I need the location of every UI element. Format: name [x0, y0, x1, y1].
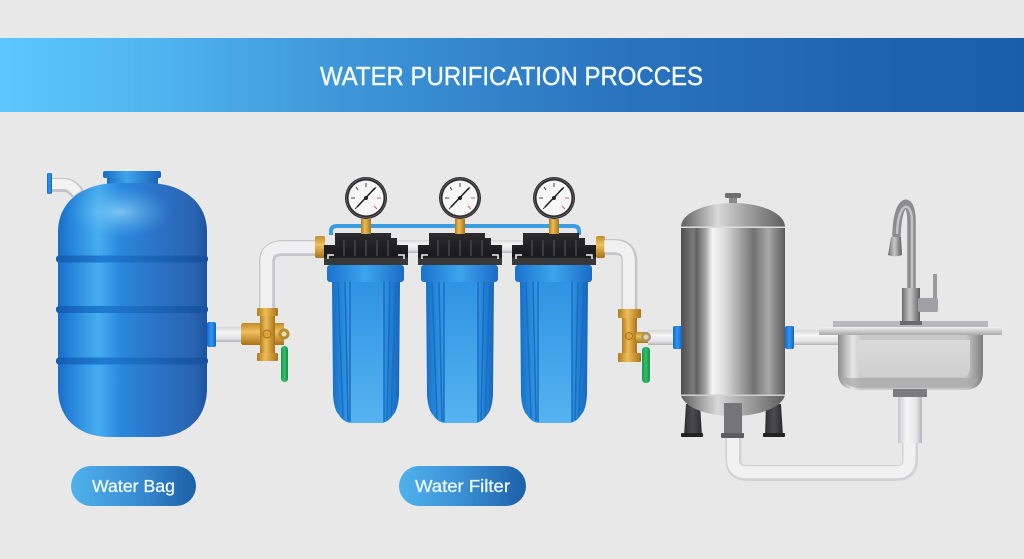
water filter 2 [418, 177, 502, 423]
water bag tank [47, 171, 208, 437]
drain pipe under tank and sink [733, 435, 910, 473]
pressure gauge 2 [439, 177, 481, 234]
sink back deck [833, 321, 988, 328]
label: water filter [399, 466, 526, 506]
sink [819, 321, 1002, 443]
outlet stub [721, 403, 744, 438]
pipe: tank to left valve [207, 322, 243, 347]
filter body and cap [418, 233, 502, 423]
handle [918, 298, 938, 312]
brass nipple right [596, 236, 605, 258]
bottom dome [681, 395, 785, 416]
water filter 3 [512, 177, 596, 423]
tank body [681, 227, 785, 395]
pressure gauge 3 [533, 177, 575, 234]
steel pressure tank [673, 193, 794, 438]
drain tail pipe [898, 397, 922, 443]
label: water filter: Water Filter [415, 476, 510, 496]
pipe: right valve to steel tank [648, 330, 674, 345]
pipe: filters down to right valve [604, 246, 630, 310]
tank highlight [68, 186, 172, 238]
valve handle [642, 347, 650, 383]
title text: WATER PURIFICATION PROCCES [320, 61, 703, 91]
sink rim [819, 327, 1002, 335]
right brass valve [618, 309, 651, 383]
tank legs [681, 404, 785, 437]
faucet base [902, 288, 920, 324]
label: water bag: Water Bag [92, 476, 175, 496]
pipe behind filters [396, 240, 536, 253]
label: water bag [71, 466, 196, 506]
pipe: left valve up to filters [266, 247, 316, 309]
brass nipple left [315, 236, 325, 258]
pipe: steel tank to sink [794, 330, 840, 345]
inlet pipe [47, 173, 78, 194]
tank neck [103, 171, 161, 186]
title banner [0, 38, 1024, 112]
drain flange [893, 389, 927, 397]
valve handle [281, 346, 288, 382]
top knob [725, 193, 741, 205]
left brass valve [241, 308, 290, 382]
blue connecting tube [331, 226, 579, 235]
pressure gauge 1 [345, 177, 387, 234]
filter body and cap [512, 233, 596, 423]
spray head [888, 237, 902, 256]
spout [896, 204, 912, 292]
filter body and cap [324, 233, 408, 423]
water filter 1 [324, 177, 408, 423]
sink bowl [838, 335, 983, 390]
tank body [58, 183, 207, 437]
top dome [681, 203, 785, 227]
tank bands [56, 256, 208, 364]
blue flanges [673, 326, 794, 349]
faucet [888, 204, 938, 325]
